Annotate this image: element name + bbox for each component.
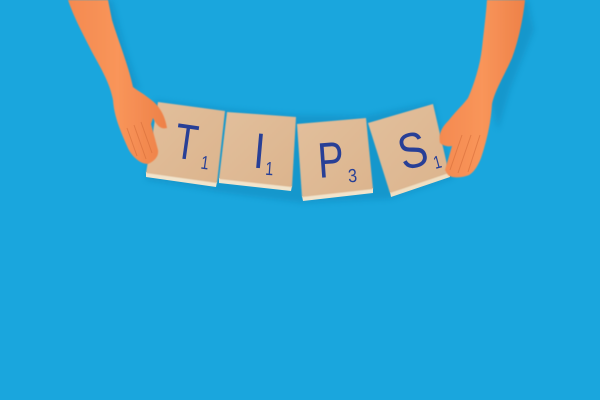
right doll arm and hand	[439, 0, 525, 177]
tile: S: S	[392, 120, 433, 181]
tile: P: P	[316, 130, 346, 189]
tile: I: 1	[265, 158, 274, 180]
tile: P	[297, 118, 373, 201]
shadows under tiles and arms	[90, 0, 534, 203]
tile: P: 3	[347, 164, 358, 187]
tile: S: 1	[432, 153, 444, 173]
tile: T: 1	[199, 152, 210, 174]
left doll arm and hand	[68, 0, 167, 164]
tile: T	[146, 102, 225, 187]
tile: I: I	[252, 122, 267, 179]
tile: S	[368, 104, 450, 197]
tile: I	[219, 112, 296, 191]
tile: T: T	[171, 114, 201, 172]
